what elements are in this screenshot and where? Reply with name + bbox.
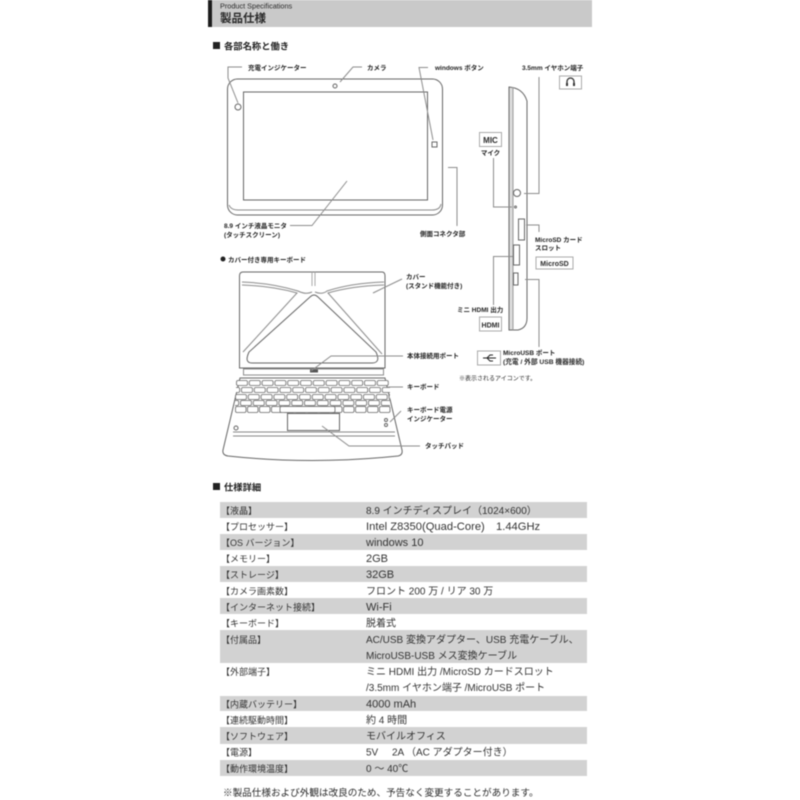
label: earphone jack: 3.5mm イヤホン端子 [522,63,584,72]
row: operating temperature: 【動作環境温度】 [221,763,293,774]
label: microphone: マイク [481,148,500,157]
row: operating temperature [221,763,408,775]
diagram: tablet front view [228,79,442,215]
row: external ports: /3.5mm イヤホン端子 /MicroUSB ポート [366,681,545,694]
label: keyboard power indicator: インジケーター [407,414,452,423]
label: microphone: MIC [483,136,498,145]
row: camera: フロント 200 万 / リア 30 万 [366,586,493,598]
label: touch screen monitor: (タッチスクリーン) [224,230,280,239]
row: processor [221,521,541,533]
row: storage [221,569,394,581]
row: software: 【ソフトウェア】 [221,732,293,742]
row: processor: 1.44GHz [496,521,541,533]
row: memory: 2GB [366,553,388,565]
row: memory [221,553,388,565]
row: software [221,730,446,742]
label: keyboard: キーボード [407,382,440,391]
heading: parts and functions: 各部名称と働き [224,40,289,52]
label: mini HDMI output: ミニ HDMI 出力 [457,305,503,314]
row: operating temperature: 0 ～ 40℃ [366,764,408,775]
label: dock connector port: 本体接続用ポート [407,351,459,360]
row: power: （AC アダプター付き） [406,746,513,758]
row: power: 【電源】 [221,748,257,758]
row: battery: 4000 mAh [366,698,416,710]
row: keyboard: 脱着式 [366,616,396,630]
label: cover: (スタンド機能付き) [406,281,462,290]
label: dock connector port [311,351,459,371]
row: OS: 【OS バージョン】 [221,538,299,548]
row: runtime: 約 4 時間 [366,714,407,726]
label: microSD slot: MicroSD カード [535,236,583,244]
row: internet [221,602,392,614]
label: side connector [420,168,466,238]
row: display: 8.9 インチディスプレイ（1024×600） [366,504,537,517]
heading: keyboard with cover: カバー付き専用キーボード [228,255,306,264]
row: camera [221,586,493,598]
diagram: tablet side view [509,87,527,330]
label: cover [373,273,462,293]
row: camera: 【カメラ画素数】 [221,586,293,596]
row: software: モバイルオフィス [366,730,446,742]
row: accessories: AC/USB 変換アダプター、USB 充電ケーブル、 [366,633,579,646]
row: accessories [221,633,579,662]
row: runtime [221,714,407,726]
header band: Product Specifications [220,2,293,10]
row: external ports [221,665,554,694]
row: storage: 【ストレージ】 [221,570,284,580]
row: OS: windows 10 [365,537,423,549]
row: power: 5V [366,748,378,758]
row: battery: 【内蔵バッテリー】 [221,698,302,710]
row: processor: 【プロセッサー】 [221,522,293,532]
row: memory: 【メモリー】 [221,554,275,564]
label: keyboard power indicator [390,405,453,423]
label: charging indicator: 充電インジケーター [248,63,306,72]
row: keyboard: 【キーボード】 [221,618,284,628]
label: windows button [419,63,484,140]
label: touch screen monitor: 8.9 インチ液晶モニタ [224,221,287,230]
row: power [221,746,513,758]
row: display [221,504,537,517]
row: accessories: MicroUSB-USB メス変換ケーブル [366,649,517,662]
header band [208,0,592,27]
label: camera [340,64,386,82]
label: microUSB port [478,280,584,366]
label: keyboard [388,382,440,391]
label: microUSB port: (充電 / 外部 USB 機器接続) [503,357,584,366]
label: touchpad: タッチパッド [425,441,464,450]
label: mini HDMI output [457,256,513,331]
row: battery [221,698,416,710]
hinge [244,369,384,375]
row: internet: 【インターネット接続】 [221,602,320,612]
row: external ports: ミニ HDMI 出力 /MicroSD カードスロット [366,665,554,678]
row: keyboard [221,616,396,630]
header band: 製品仕様 [220,11,266,25]
label: camera: カメラ [367,64,386,72]
label: keyboard power indicator: キーボード電源 [407,405,453,414]
row stripes [220,502,587,776]
label: earphone jack [522,63,584,194]
row: runtime: 【連続駆動時間】 [221,714,293,726]
row: internet: Wi-Fi [366,602,392,614]
diagram: keyboard with cover [223,272,402,460]
spec table [220,502,587,776]
label: microphone [480,132,512,207]
keyboard deck [223,378,402,460]
label: touchpad [322,426,464,450]
label: microSD slot: MicroSD [540,261,569,268]
label: charging indicator [228,63,306,103]
key rows [235,380,391,413]
label: microUSB port: MicroUSB ポート [503,349,555,357]
footnote: ※製品仕様および外観は改良のため、予告なく変更することがあります。 [223,787,539,799]
row: power: 2A [392,748,405,758]
touchpad [288,414,340,430]
note: displayed icons: ※表示されるアイコンです。 [459,374,536,382]
row: storage: 32GB [366,569,394,581]
heading: spec details: 仕様詳細 [224,482,261,492]
label: touch screen monitor [224,181,347,239]
label: cover: カバー [406,273,426,281]
row: accessories: 【付属品】 [221,635,266,645]
label: windows button: windows ボタン [434,63,484,72]
row: display: 【液晶】 [221,506,257,516]
cover panel [240,272,385,368]
label: mini HDMI output: HDMI [482,322,499,330]
row: OS [221,537,423,549]
label: side connector: 側面コネクタ部 [420,229,466,238]
label: microSD slot [526,225,583,269]
row: external ports: 【外部端子】 [221,666,275,677]
row: processor: Intel Z8350(Quad-Core) [366,521,485,533]
label: microSD slot: スロット [535,244,561,252]
